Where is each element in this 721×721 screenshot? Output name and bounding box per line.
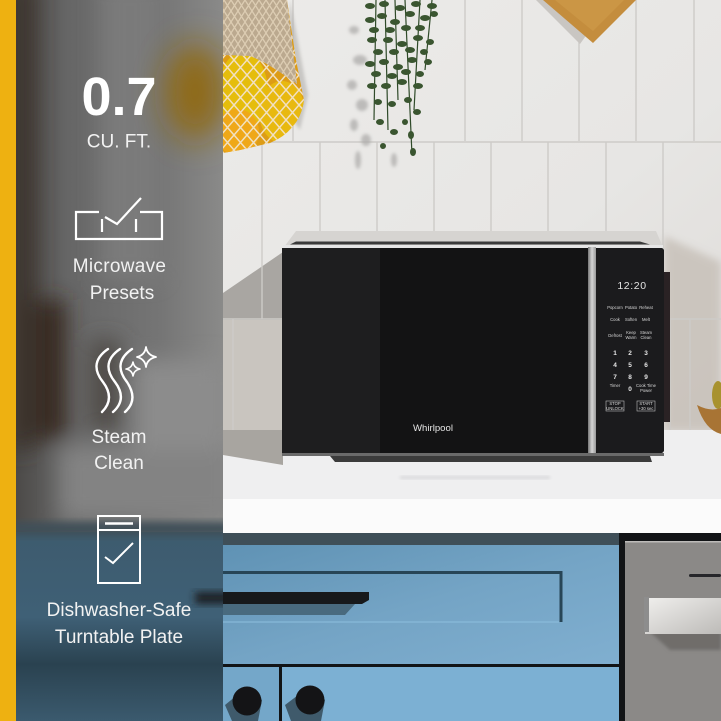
control panel: Power [640, 388, 653, 393]
control panel: Potato [625, 305, 638, 310]
control panel: 8 [628, 374, 632, 381]
control panel: 2 [628, 350, 632, 357]
control panel: +30 sec [639, 406, 653, 411]
feature: microwave presets [73, 198, 166, 304]
control panel: START [639, 401, 653, 406]
control panel: STOP [609, 401, 621, 406]
translucent blurred side panel [6, 0, 235, 721]
control panel: 7 [613, 374, 617, 381]
brand logo: Whirlpool [413, 423, 453, 434]
icon: steam waves and sparkles [96, 347, 156, 412]
feature: dishwasher-safe turntable plate [47, 516, 191, 648]
control panel: Timer [610, 383, 621, 388]
control panel: 0 [628, 386, 632, 393]
control panel: Reheat [639, 305, 654, 310]
fruit bowl at right edge [697, 381, 721, 434]
door knobs [225, 687, 262, 721]
stop and start buttons [606, 401, 624, 411]
clock display: 12:20 [617, 280, 647, 292]
control panel: Cook Time [636, 383, 657, 388]
control panel: Popcorn [607, 305, 623, 310]
control panel [606, 280, 657, 411]
control panel: 4 [613, 362, 617, 369]
feature: microwave presets: Microwave [73, 256, 166, 277]
hanging plant [347, 0, 438, 169]
control panel: Steam [640, 330, 653, 335]
feature: dishwasher-safe turntable plate: Turntable Plate [55, 627, 183, 648]
control panel: Warm [625, 335, 637, 340]
control panel: 1 [613, 350, 617, 357]
control panel: 9 [644, 374, 648, 381]
kitchen wall with tiles [223, 0, 721, 431]
fruit net bag with lemons [223, 0, 309, 153]
drawer handle [223, 592, 369, 604]
control panel: 3 [644, 350, 648, 357]
control panel: 5 [628, 362, 632, 369]
feature: steam clean: Steam [92, 427, 146, 448]
accent bar [0, 0, 16, 721]
stat: 0.7 cu. ft.: 0.7 [81, 67, 157, 127]
countertop [223, 430, 721, 533]
kitchen cabinets [223, 533, 721, 721]
feature: dishwasher-safe turntable plate: Dishwasher-Safe [47, 600, 191, 621]
control panel: 6 [644, 362, 648, 369]
control panel: UNLOCK [606, 406, 624, 411]
icon: dishwasher with check [98, 516, 140, 583]
feature: steam clean [92, 347, 156, 474]
stat: 0.7 cu. ft.: CU. FT. [87, 132, 151, 152]
control panel: Defrost [608, 333, 623, 338]
icon: presets check [76, 198, 162, 239]
feature: microwave presets: Presets [90, 283, 154, 304]
control panel: Clean [641, 335, 652, 340]
pot holder [536, 0, 636, 44]
control panel: Cook [610, 317, 621, 322]
control panel: Soften [625, 317, 638, 322]
control panel: Melt [642, 317, 651, 322]
dishwasher [625, 542, 721, 721]
control panel: Keep [626, 330, 637, 335]
feature: steam clean: Clean [94, 453, 144, 474]
microwave [282, 231, 670, 462]
